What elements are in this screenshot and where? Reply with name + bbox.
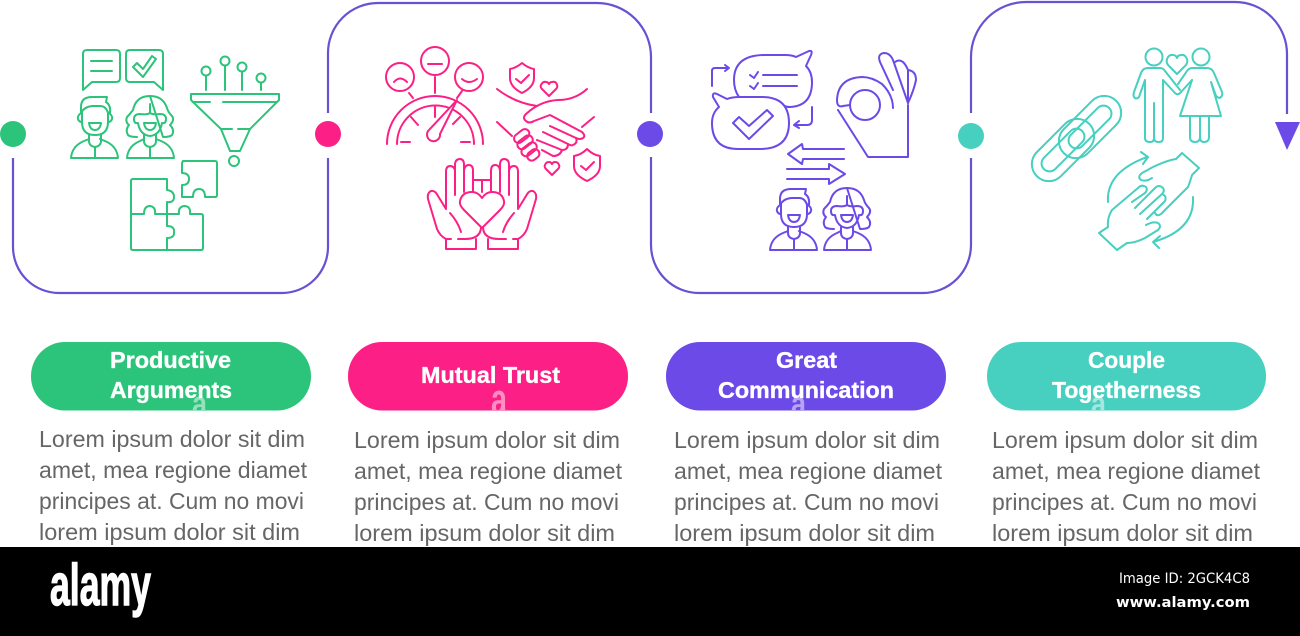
body text [354,427,623,546]
website url: www.alamy.com [1116,595,1250,611]
pill heading: mutual trust: a [491,375,507,424]
pill heading: couple togetherness: Togetherness [1052,377,1201,403]
body text [674,427,943,546]
body text: lorem ipsum dolor sit dim [992,520,1253,546]
icon: couple holding hands [1134,48,1222,142]
icon: OK hand gesture [837,53,916,157]
icon group: couple togetherness [1025,48,1222,250]
icon group: great communication [712,51,916,250]
body text: principes at. Cum no movi [39,488,304,514]
card: productive arguments [31,342,311,545]
icon: man [71,97,118,158]
step marker: teal [958,123,984,149]
icon: handshake with shields [497,63,600,181]
icon: hands holding heart [428,159,536,249]
arrow head [1275,122,1300,150]
footer band [0,547,1300,636]
pill heading: productive arguments: Productive [110,347,231,373]
card: mutual trust [348,342,628,546]
icon: speech bubbles [712,51,812,149]
icon: woman [126,96,174,158]
card: couple togetherness [987,342,1266,546]
body text: amet, mea regione diamet [39,457,308,483]
body text [992,427,1261,546]
icon: chain links [1025,89,1128,188]
icon: puzzle pieces [131,161,217,250]
image id: Image ID: 2GCK4C8 [1119,571,1250,587]
body text: Lorem ipsum dolor sit dim [354,427,620,453]
pill heading: couple togetherness: a [1091,383,1107,424]
flow connector line [13,2,1287,293]
pill heading: productive arguments: Arguments [110,377,232,403]
body text: amet, mea regione diamet [354,458,623,484]
body text: lorem ipsum dolor sit dim [674,520,935,546]
body text [39,426,308,545]
icon: speech bubble with check [126,50,163,90]
body text: amet, mea regione diamet [674,458,943,484]
pill heading: mutual trust [348,342,628,410]
icon: joined hands with cycle arrows [1099,152,1199,250]
body text: principes at. Cum no movi [674,489,939,515]
body text: Lorem ipsum dolor sit dim [674,427,940,453]
icon: woman [823,188,871,250]
body text: lorem ipsum dolor sit dim [39,519,300,545]
pill heading: productive arguments: a [192,383,208,424]
icon: exchange arrows [787,144,845,184]
pill heading: great communication: a [791,383,807,424]
pill heading: productive arguments [31,342,311,410]
icon group: productive arguments [71,50,279,250]
body text: amet, mea regione diamet [992,458,1261,484]
step marker: purple [637,121,663,147]
card: great communication [666,342,946,546]
body text: principes at. Cum no movi [992,489,1257,515]
icon group: mutual trust [386,47,600,249]
step marker: green [0,121,26,147]
pill heading: great communication: Communication [718,377,894,403]
pill heading: great communication: Great [776,347,837,373]
body text: lorem ipsum dolor sit dim [354,520,615,546]
step marker: pink [315,121,341,147]
pill heading: couple togetherness: Couple [1088,347,1165,373]
body text: principes at. Cum no movi [354,489,619,515]
watermark logo: alamy [50,553,151,618]
pill heading: couple togetherness [987,342,1266,410]
icon: speech bubble with lines [83,50,120,90]
pill heading: mutual trust: Mutual Trust [421,362,560,388]
body text: Lorem ipsum dolor sit dim [992,427,1258,453]
icon: filter funnel [191,56,279,166]
body text: Lorem ipsum dolor sit dim [39,426,305,452]
icon: man [770,189,817,250]
icon: satisfaction gauge [386,47,483,144]
pill heading: great communication [666,342,946,410]
